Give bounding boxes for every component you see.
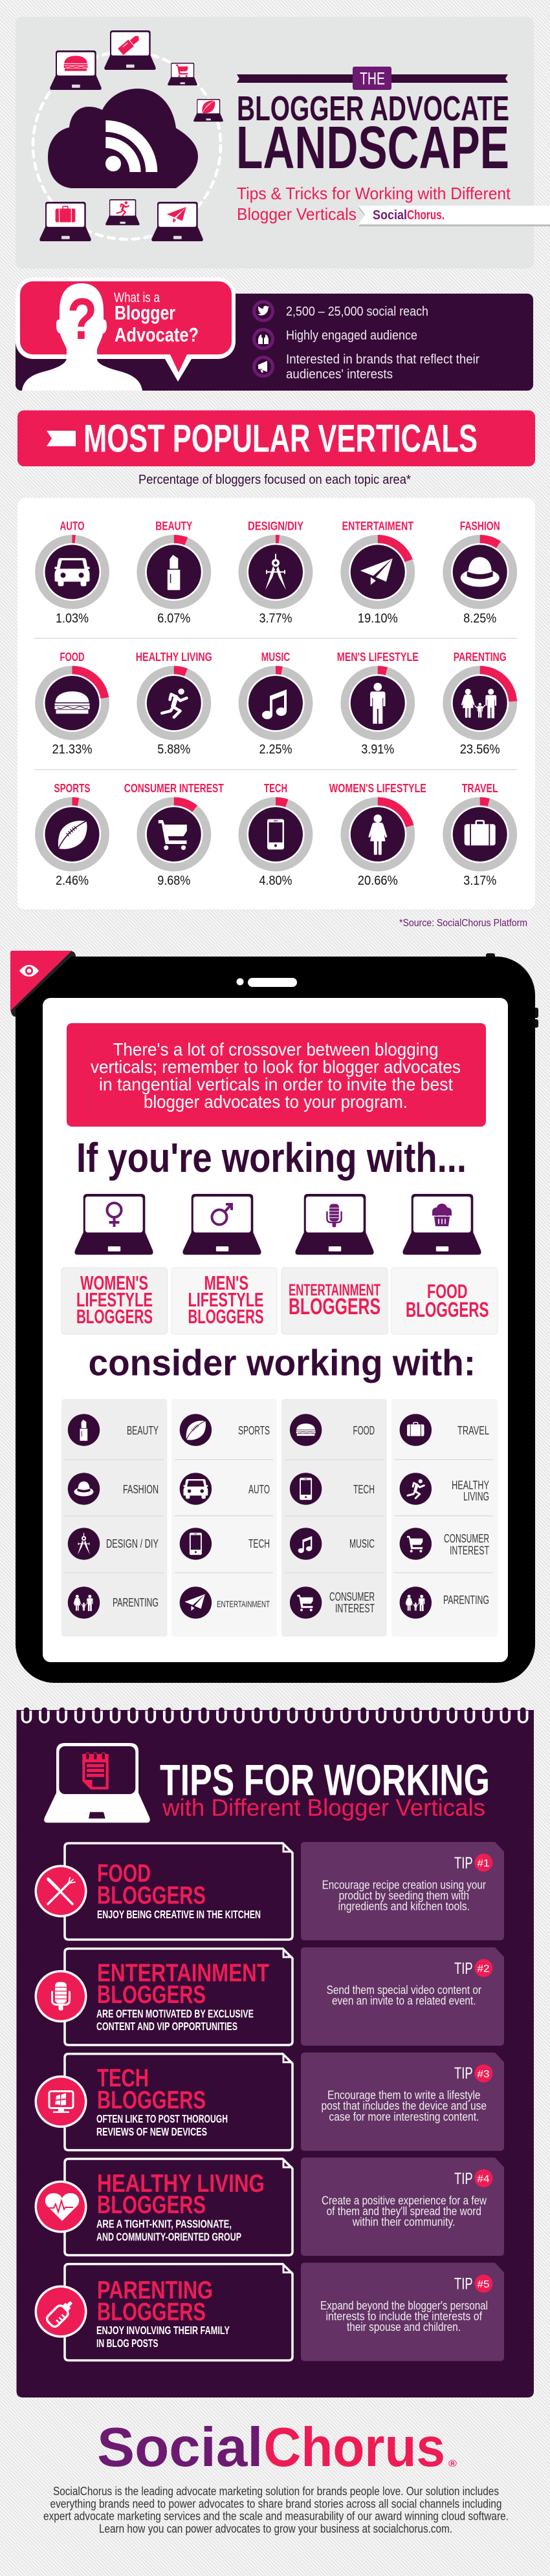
card: tip 5: TIP: [454, 2275, 473, 2293]
logo: SocialChorus: Social: [97, 2417, 263, 2478]
item: healthy living: HEALTHY: [452, 1478, 489, 1491]
card: tip 1: Encourage recipe creation using your: [322, 1878, 486, 1891]
donut: design: 3.77%: [259, 611, 292, 625]
item: entertainment: ENTERTAINMENT: [217, 1599, 270, 1609]
icon: laptop food: [402, 1194, 481, 1255]
item: parenting: PARENTING: [443, 1594, 489, 1607]
card: tip 3: post that includes the device and use: [321, 2099, 487, 2112]
heading: Blogger: [115, 301, 175, 324]
donut: men's lifestyle: MEN'S LIFESTYLE: [337, 650, 419, 664]
cell: women's lifestyle bloggers: LIFESTYLE: [76, 1289, 153, 1311]
card: tech bloggers: REVIEWS OF NEW DEVICES: [96, 2125, 207, 2138]
item: auto: AUTO: [248, 1483, 270, 1496]
facts: 2,500 – 25,000 social reach: [286, 305, 428, 319]
item: fashion: [68, 1473, 159, 1505]
question mark: ?: [67, 287, 97, 352]
donut: consumer interest: [124, 781, 224, 888]
card: healthy living bloggers: BLOGGERS: [97, 2191, 206, 2219]
facts: [286, 305, 479, 382]
notebook spirals: [21, 1707, 528, 1724]
title: [236, 89, 509, 181]
donut: consumer interest: 9.68%: [157, 874, 190, 888]
donut: men's lifestyle: 3.91%: [361, 742, 394, 757]
card: tip 4: TIP: [454, 2170, 473, 2188]
title ribbon: THE: [360, 69, 385, 88]
icon: monitor: [49, 2092, 73, 2113]
card: tip 1: [301, 1842, 504, 1940]
speech bubble: [16, 277, 236, 382]
item: design: DESIGN / DIY: [106, 1537, 159, 1550]
card: food bloggers: FOOD: [97, 1859, 151, 1887]
cell: entertainment bloggers: [281, 1268, 388, 1334]
icon: microphone: [52, 1982, 70, 2011]
icon: flag: [47, 431, 76, 446]
card: tip 1: #1: [478, 1858, 490, 1869]
logo: SocialChorus: ®: [448, 2458, 457, 2469]
logo: SocialChorus: Chorus: [264, 2417, 445, 2478]
card: tip 2: [301, 1947, 504, 2046]
facts: Interested in brands that reflect their: [286, 352, 479, 367]
icon: laptop men: [182, 1194, 261, 1255]
donut: design: DESIGN/DIY: [248, 519, 304, 532]
donut: auto: 1.03%: [56, 611, 89, 625]
item: auto: [180, 1473, 270, 1505]
card: parenting bloggers: ENJOY INVOLVING THEIR FAMILY: [96, 2324, 230, 2337]
cell: entertainment bloggers: ENTERTAINMENT: [289, 1282, 380, 1299]
donut: travel: TRAVEL: [462, 781, 498, 795]
heading: Advocate?: [115, 323, 199, 346]
card: tip 4: [301, 2158, 504, 2256]
callout: crossover: There's a lot of crossover between blogging: [113, 1039, 439, 1059]
donut: fashion: FASHION: [460, 519, 500, 532]
card: tip 4: Create a positive experience for a few: [322, 2194, 487, 2207]
card: healthy living bloggers: HEALTHY LIVING: [97, 2170, 265, 2198]
card: tip 2: #2: [478, 1964, 490, 1975]
icon: laptop plane: [151, 202, 203, 241]
item: consumer interest: CONSUMER: [444, 1532, 489, 1545]
card: parenting bloggers: IN BLOG POSTS: [96, 2337, 158, 2350]
icon: laptop lipstick: [104, 30, 156, 70]
heading: [114, 290, 199, 346]
icon: laptop luggage: [39, 202, 91, 241]
heading: tips for working: with Different Blogger Verticals: [162, 1795, 485, 1821]
item: consumer interest: CONSUMER: [329, 1590, 375, 1603]
callout: crossover: in tangential verticals in order to invite the best: [99, 1074, 453, 1094]
card: tip 5: #5: [478, 2279, 490, 2290]
icon: hands bullet: [254, 330, 273, 348]
banner: most popular verticals: [17, 410, 535, 466]
panel: tips notebook: [17, 1707, 534, 2397]
donut: healthy living: HEALTHY LIVING: [136, 650, 212, 664]
cell: entertainment bloggers: BLOGGERS: [289, 1293, 380, 1319]
cell: food bloggers: BLOGGERS: [406, 1297, 489, 1321]
donut: entertainment: [342, 519, 414, 625]
facts: Highly engaged audience: [286, 329, 417, 343]
panel: header: [16, 17, 550, 268]
panel: tablet device: [10, 951, 538, 1683]
logo: SocialChorus: [97, 2417, 457, 2478]
logo ribbon: Social: [373, 208, 407, 222]
heading: tips for working: [160, 1755, 490, 1821]
item: consumer interest: [400, 1528, 489, 1560]
item: beauty: [68, 1414, 159, 1446]
corner tag with eye icon: [10, 951, 76, 1017]
icon: twitter bullet: [254, 301, 273, 321]
donut: food: FOOD: [60, 650, 84, 664]
callout: crossover: verticals; remember to look for blogger advocates: [91, 1057, 461, 1077]
card: tip 2: Send them special video content or: [327, 1984, 481, 1997]
card: healthy living bloggers: AND COMMUNITY-ORIENTED GROUP: [96, 2231, 241, 2244]
callout: crossover: blogger advocates to your program.: [144, 1092, 408, 1112]
cell: food bloggers: [391, 1268, 498, 1334]
subtitle: Blogger Verticals: [237, 204, 357, 224]
card: tip 1: product by seeding them with: [339, 1889, 469, 1902]
card: parenting bloggers: PARENTING: [97, 2277, 213, 2304]
card: tip 5: Expand beyond the blogger's personal: [320, 2299, 488, 2312]
donut: design: [243, 519, 309, 625]
donut: women's lifestyle: WOMEN'S LIFESTYLE: [329, 781, 426, 795]
card: tip 4: #4: [478, 2174, 490, 2185]
card: food bloggers: BLOGGERS: [97, 1882, 206, 1910]
panel: what is a blogger advocate: [16, 277, 533, 391]
cell: women's lifestyle bloggers: [61, 1268, 167, 1334]
card: tech bloggers: BLOGGERS: [97, 2086, 206, 2114]
card: tip 4: of them and they'll spread the word: [327, 2205, 481, 2218]
icon: laptop burger: [50, 50, 102, 90]
cell: men's lifestyle bloggers: [171, 1268, 277, 1334]
donut: beauty: [141, 519, 207, 625]
donut: beauty: BEAUTY: [155, 519, 193, 532]
item: sports: SPORTS: [238, 1424, 270, 1437]
donut: tech: TECH: [264, 781, 287, 795]
item: consumer interest: INTEREST: [450, 1544, 489, 1557]
card: entertainment bloggers: [35, 1949, 292, 2045]
footer text: Learn how you can power advocates to grow your business at socialchorus.com.: [99, 2522, 452, 2535]
donut: food: 21.33%: [52, 742, 93, 757]
icon: laptop entertainment: [295, 1194, 374, 1255]
card: tech bloggers: OFTEN LIKE TO POST THOROUGH: [96, 2112, 228, 2125]
donut: auto: [39, 519, 105, 625]
item: food: [290, 1414, 375, 1446]
caption: Percentage of bloggers focused on each topic area*: [138, 473, 411, 487]
card: parenting bloggers: BLOGGERS: [97, 2299, 206, 2326]
donut: entertainment: ENTERTAIMENT: [342, 519, 414, 532]
card: entertainment bloggers: ENTERTAINMENT: [97, 1959, 269, 1987]
donut: music: [243, 650, 309, 757]
logo ribbon: [358, 206, 550, 226]
item: parenting: [400, 1586, 489, 1619]
donut: sports: 2.46%: [56, 874, 89, 888]
card: food bloggers: [35, 1843, 292, 1940]
cell: men's lifestyle bloggers: LIFESTYLE: [188, 1289, 264, 1311]
item: tech: [290, 1473, 375, 1505]
item: music: [290, 1528, 375, 1560]
grid: consider verticals: [61, 1399, 498, 1636]
icon: heart with pulse: [45, 2193, 79, 2221]
card: parenting bloggers: [35, 2264, 292, 2361]
card: tip 2: even an invite to a related event.: [332, 1995, 476, 2008]
facts: audiences' interests: [286, 367, 393, 382]
card: tip 1: ingredients and kitchen tools.: [338, 1900, 470, 1913]
card: tip 4: within their community.: [352, 2216, 456, 2229]
icon: megaphone bullet: [254, 357, 273, 376]
cell: women's lifestyle bloggers: BLOGGERS: [76, 1306, 153, 1328]
card: tech bloggers: TECH: [97, 2064, 149, 2092]
donut: entertainment: 19.10%: [358, 611, 398, 625]
cell: food bloggers: FOOD: [427, 1280, 467, 1303]
item: sports: [180, 1414, 270, 1446]
card: tip 3: Encourage them to write a lifestyle: [327, 2089, 480, 2102]
item: design: [68, 1528, 159, 1560]
cell: men's lifestyle bloggers: MEN'S: [204, 1272, 248, 1294]
card: tip 3: #3: [478, 2069, 490, 2080]
item: travel: TRAVEL: [457, 1424, 489, 1437]
card: tip 5: interests to include the interests of: [326, 2310, 483, 2323]
icon: laptop with notepad: [44, 1743, 150, 1823]
donut: auto: AUTO: [60, 519, 84, 532]
donut: women's lifestyle: 20.66%: [358, 874, 398, 888]
heading: consider working with: consider working with:: [88, 1343, 476, 1384]
item: beauty: BEAUTY: [127, 1424, 159, 1437]
card: healthy living bloggers: ARE A TIGHT-KNIT, PASSIONATE,: [96, 2218, 232, 2231]
item: parenting: PARENTING: [113, 1596, 159, 1609]
donut: healthy living: [136, 650, 212, 757]
donut: music: MUSIC: [261, 650, 290, 664]
icon: head silhouette: [22, 283, 142, 391]
heading: if you're working with: If you're working with...: [76, 1134, 467, 1181]
item: fashion: FASHION: [123, 1483, 159, 1496]
item: tech: TECH: [248, 1537, 270, 1550]
item: music: MUSIC: [349, 1537, 375, 1550]
subtitle: [237, 184, 511, 224]
card: tip 3: case for more interesting content.: [329, 2110, 479, 2123]
icon: fork and knife: [48, 1878, 75, 1904]
footer text: [43, 2485, 509, 2535]
card: tip 3: TIP: [454, 2064, 473, 2083]
donut: men's lifestyle: [337, 650, 419, 757]
donut: tech: [243, 781, 309, 888]
donut: music: 2.25%: [259, 742, 292, 757]
icon: laptop women: [74, 1194, 153, 1255]
subtitle: Tips & Tricks for Working with Different: [237, 184, 511, 203]
donut: sports: SPORTS: [54, 781, 91, 795]
card: tip 5: [301, 2263, 504, 2361]
tablet speaker: [237, 978, 297, 987]
logo ribbon: Chorus.: [407, 208, 445, 222]
item: healthy living: LIVING: [463, 1490, 489, 1503]
donut: beauty: 6.07%: [157, 611, 190, 625]
item: consumer interest: [290, 1586, 375, 1619]
item: food: FOOD: [353, 1424, 375, 1437]
callout: crossover: [67, 1023, 486, 1127]
item: parenting: [68, 1586, 159, 1619]
donut: food: [39, 650, 105, 757]
donut: parenting: [447, 650, 513, 757]
item: entertainment: [180, 1586, 270, 1619]
card: entertainment bloggers: ARE OFTEN MOTIVATED BY EXCLUSIVE: [96, 2008, 254, 2020]
cell: men's lifestyle bloggers: BLOGGERS: [188, 1306, 264, 1328]
donut: fashion: [447, 519, 513, 625]
card: healthy living bloggers: [35, 2159, 292, 2255]
item: consumer interest: INTEREST: [335, 1602, 375, 1615]
donut: travel: 3.17%: [463, 874, 496, 888]
donut: fashion: 8.25%: [463, 611, 496, 625]
icon: baby bottle: [45, 2297, 76, 2328]
dashed ring: [33, 52, 221, 239]
donut: healthy living: 5.88%: [157, 742, 190, 757]
icon: cloud with RSS: [48, 89, 198, 188]
item: healthy living: [400, 1473, 489, 1505]
title ribbon: [237, 67, 508, 90]
donut: travel: [447, 781, 513, 888]
item: travel: [400, 1414, 489, 1446]
card: tip 3: [301, 2053, 504, 2151]
icon: laptop runner: [105, 199, 140, 225]
icon: laptop cart: [168, 63, 197, 85]
donut: tech: 4.80%: [259, 874, 292, 888]
donut: sports: [39, 781, 105, 888]
card: entertainment bloggers: BLOGGERS: [97, 1981, 206, 2009]
cell: women's lifestyle bloggers: WOMEN'S: [80, 1272, 148, 1294]
donut: parenting: PARENTING: [454, 650, 507, 664]
source note: *Source: SocialChorus Platform: [399, 918, 527, 929]
card: tech bloggers: [35, 2054, 292, 2150]
card: food bloggers: ENJOY BEING CREATIVE IN THE KITCHEN: [97, 1908, 261, 1921]
donut: women's lifestyle: [329, 781, 426, 888]
card: tip 1: TIP: [454, 1854, 473, 1872]
item: tech: TECH: [353, 1483, 375, 1496]
card: tip 5: their spouse and children.: [347, 2321, 461, 2333]
item: tech: [180, 1528, 270, 1560]
donut: consumer interest: CONSUMER INTEREST: [124, 781, 224, 795]
icon: laptop leaf ball: [193, 99, 223, 122]
card: tip 2: TIP: [454, 1960, 473, 1978]
heading: What is a: [114, 290, 160, 305]
card: entertainment bloggers: CONTENT AND VIP OPPORTUNITIES: [96, 2020, 237, 2033]
donut: parenting: 23.56%: [460, 742, 500, 757]
panel: verticals chart: [17, 498, 535, 909]
